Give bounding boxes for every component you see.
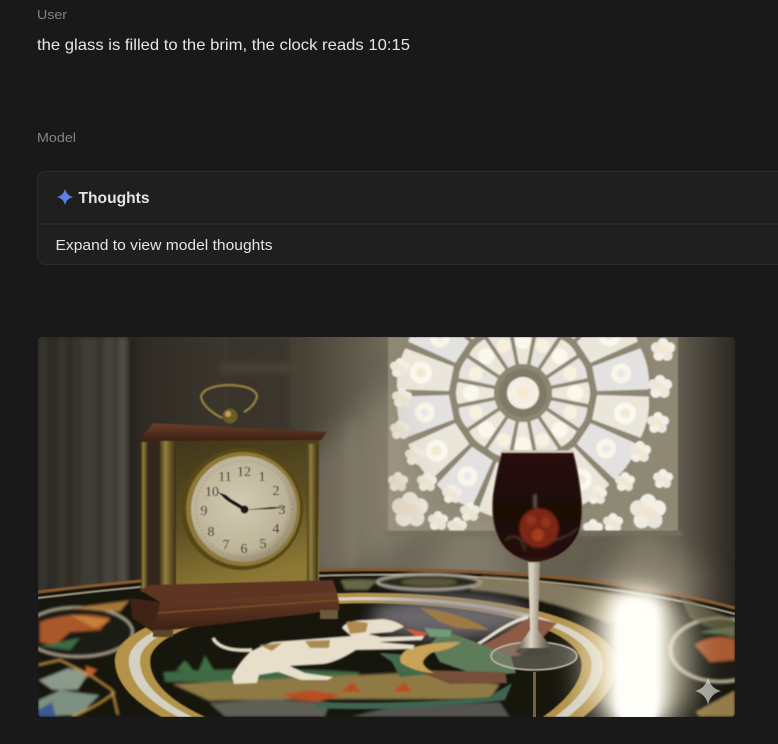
wine glass bbox=[491, 452, 582, 670]
clock hands at 10:15 bbox=[218, 492, 287, 514]
wall background bbox=[38, 337, 735, 607]
mantel clock bbox=[130, 385, 340, 637]
medallion rings bbox=[114, 592, 614, 717]
window sill bbox=[384, 531, 682, 536]
dragon bbox=[314, 608, 557, 709]
clock dial bbox=[191, 456, 297, 562]
left stone pillar bbox=[38, 337, 136, 602]
clock top cap bbox=[138, 423, 327, 441]
distant pillar bbox=[224, 338, 289, 430]
clock base bbox=[130, 580, 340, 637]
clock numerals: 1 bbox=[258, 470, 266, 485]
label: Model: Model bbox=[37, 130, 76, 145]
stem reflection bbox=[533, 672, 536, 717]
clock numerals: 9 bbox=[200, 504, 208, 519]
label: User: User bbox=[37, 7, 68, 22]
clock numerals: 11 bbox=[218, 470, 232, 485]
rose window reflection in wine bbox=[505, 494, 578, 550]
clock body bbox=[175, 440, 320, 585]
clock numerals: 8 bbox=[208, 525, 214, 540]
clock numerals: 12 bbox=[237, 465, 251, 480]
clock numerals: 7 bbox=[222, 538, 230, 553]
clock numerals: 3 bbox=[278, 503, 286, 518]
clock bezel bbox=[181, 448, 303, 570]
panel: thoughts card bbox=[38, 172, 778, 264]
clock numerals: 4 bbox=[272, 522, 280, 537]
clock numerals bbox=[200, 465, 286, 557]
generated image: clock and wine glass on a marble table bbox=[38, 337, 735, 717]
glass bowl filled with wine bbox=[492, 452, 582, 562]
table reflection bbox=[370, 595, 530, 639]
marble table bbox=[38, 568, 735, 717]
clock numerals: 6 bbox=[240, 542, 248, 557]
dog bbox=[213, 619, 424, 684]
icon: blue sparkle bbox=[57, 189, 73, 205]
clock right column bbox=[307, 444, 318, 582]
glass foot bbox=[491, 642, 577, 670]
clock handle bbox=[201, 385, 257, 424]
glass stem bbox=[517, 562, 552, 648]
light beams from the window bbox=[318, 389, 714, 597]
bright light bloom on the table bbox=[585, 585, 690, 730]
clock numerals: 5 bbox=[260, 537, 266, 552]
user prompt text: the glass is filled to the brim, the clock reads 10:15 bbox=[37, 37, 410, 54]
ground inlay bbox=[163, 655, 510, 717]
rose window bbox=[387, 337, 678, 532]
clock left column bbox=[160, 441, 176, 596]
clock numerals: 2 bbox=[272, 484, 280, 499]
clock numerals: 10 bbox=[205, 485, 219, 500]
icon: watermark sparkle bbox=[695, 677, 721, 705]
heading: Thoughts: Thoughts bbox=[78, 190, 150, 207]
card body text: Expand to view model thoughts bbox=[56, 238, 272, 254]
inlay flowers on table border bbox=[23, 574, 770, 717]
